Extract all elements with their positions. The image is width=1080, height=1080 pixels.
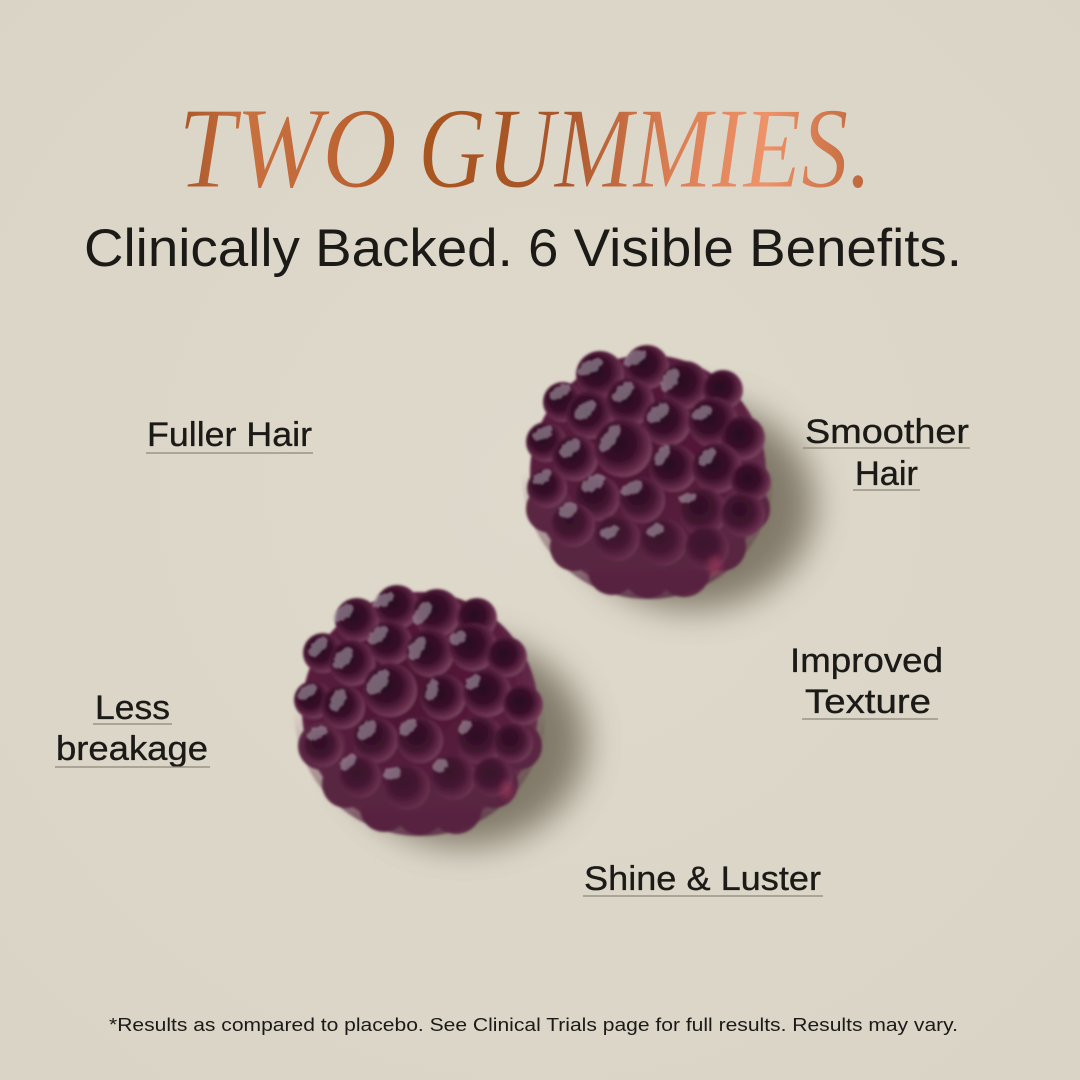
footnote: *Results as compared to placebo. See Clinical Trials page for full results. Results may vary. <box>109 1014 958 1035</box>
title: TWO <box>178 85 397 213</box>
gummy shadow <box>570 401 814 609</box>
label: Fuller Hair: Fuller Hair <box>147 416 312 454</box>
label: Shine & Luster: Shine & Luster <box>584 860 821 898</box>
gummy highlights <box>295 589 484 782</box>
label: Improved Texture: Texture <box>805 683 931 721</box>
gummy body <box>294 584 546 836</box>
label: Less breakage <box>55 689 210 768</box>
gummy highlights <box>529 346 719 541</box>
gummy body <box>522 345 774 599</box>
gummy: lower left <box>294 584 586 846</box>
label: Smoother Hair <box>803 413 970 493</box>
gummy: upper right <box>522 345 814 609</box>
gummy shadow <box>342 638 586 846</box>
label: Smoother Hair: Hair <box>855 455 918 493</box>
label: Improved Texture: Improved <box>790 642 943 680</box>
label: Improved Texture <box>790 642 943 721</box>
label: Less breakage: Less <box>95 689 170 727</box>
label: Less breakage: breakage <box>56 730 208 768</box>
title: GUMMIES. <box>418 85 872 213</box>
label: Smoother Hair: Smoother <box>805 413 969 451</box>
subtitle: Clinically Backed. 6 Visible Benefits. <box>84 219 962 278</box>
title <box>178 85 872 213</box>
